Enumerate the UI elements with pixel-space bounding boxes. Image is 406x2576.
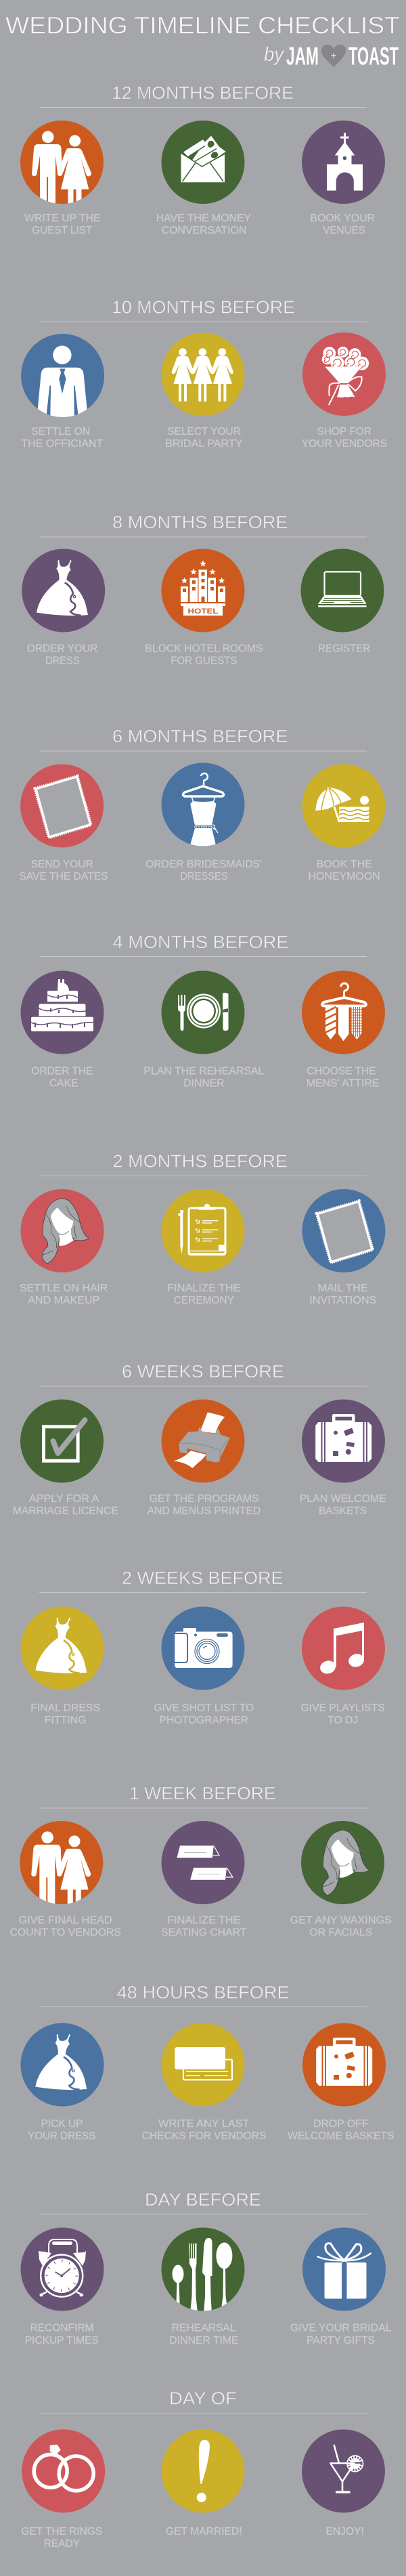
label: order your dress — [27, 643, 97, 666]
label: enjoy: ENJOY! — [325, 2526, 364, 2537]
label: shop for your vendors — [302, 426, 387, 450]
label: finalize the seating chart — [161, 1915, 247, 1938]
label: book your venues — [310, 213, 375, 236]
label: drop off welcome baskets: WELCOME BASKETS — [288, 2130, 394, 2142]
section: day of — [21, 2388, 385, 2550]
label: have the money conversation: HAVE THE MONEY — [156, 213, 251, 224]
icon: stamp — [20, 764, 104, 848]
label: rehearsal dinner time — [169, 2323, 238, 2346]
label: select your bridal party — [165, 426, 243, 450]
label: book the honeymoon: HONEYMOON — [308, 871, 380, 882]
heading: 2 WEEKS BEFORE — [122, 1568, 283, 1588]
icon: alarm clock — [20, 2228, 104, 2311]
heading: 1 WEEK BEFORE — [129, 1783, 276, 1803]
heading: 8 MONTHS BEFORE — [112, 512, 288, 532]
section: 1 week before — [9, 1783, 392, 1938]
label: shop for your vendors: YOUR VENDORS — [302, 438, 387, 450]
label: order your dress: DRESS — [45, 656, 80, 666]
label: finalize the seating chart: FINALIZE THE — [167, 1915, 241, 1926]
label: pick up your dress: PICK UP — [41, 2118, 83, 2130]
byline: by Jam + Toast logo: by — [264, 43, 285, 66]
icon: dress — [20, 2023, 104, 2106]
label: give your bridal party gifts: PARTY GIFTS — [307, 2335, 375, 2346]
label: select your bridal party: SELECT YOUR — [167, 426, 241, 437]
label: register: REGISTER — [318, 643, 370, 654]
label: choose the mens' attire: CHOOSE THE — [307, 1066, 376, 1077]
heading: 48 HOURS BEFORE — [117, 1982, 290, 2002]
label: mail the invitations: MAIL THE — [318, 1283, 368, 1294]
icon: couple — [20, 1821, 103, 1907]
icon: bouquet — [302, 332, 386, 416]
section: 2 months before — [20, 1151, 386, 1306]
heading: DAY BEFORE — [145, 2189, 261, 2210]
icon: money envelope — [161, 121, 245, 204]
label: finalize the ceremony: FINALIZE THE — [167, 1283, 241, 1294]
label: book the honeymoon — [308, 859, 380, 882]
label: order the cake — [31, 1066, 93, 1089]
icon: camera — [161, 1606, 245, 1690]
icon: beach umbrella — [302, 764, 386, 848]
byline: by Jam + Toast logo: JAM — [286, 42, 319, 70]
label: give final head count to vendors: GIVE FINAL HEAD — [19, 1915, 112, 1926]
section: 6 months before — [19, 726, 386, 882]
section: 12 months before — [20, 83, 385, 236]
label: block hotel rooms for guests: BLOCK HOTEL ROOMS — [145, 643, 263, 654]
label: write up the guest list: GUEST LIST — [32, 225, 92, 236]
section: 8 months before — [22, 512, 384, 666]
label: get the programs and menus printed: AND MENUS PRINTED — [148, 1505, 261, 1517]
label: settle on the officiant — [21, 426, 104, 450]
label: final dress fitting — [30, 1702, 100, 1726]
label: give your bridal party gifts: GIVE YOUR BRIDAL — [290, 2323, 392, 2334]
label: apply for a marriage licence: APPLY FOR A — [29, 1493, 99, 1505]
label: shop for your vendors: SHOP FOR — [317, 426, 371, 437]
byline: by Jam + Toast logo: + — [330, 50, 337, 62]
label: settle on hair and makeup: AND MAKEUP — [28, 1295, 99, 1306]
icon: cutlery — [161, 2228, 245, 2313]
icon: officiant — [21, 334, 104, 420]
label: plan the rehearsal dinner: DINNER — [183, 1078, 224, 1089]
label: have the money conversation — [156, 213, 251, 236]
icon: ties on hanger — [302, 971, 385, 1054]
label: get the rings ready: GET THE RINGS — [21, 2526, 102, 2537]
label: write up the guest list: WRITE UP THE — [24, 213, 100, 224]
icon: printer — [161, 1399, 245, 1483]
section: 48 hours before — [20, 1982, 394, 2142]
icon: couple — [20, 121, 104, 206]
label: select your bridal party: BRIDAL PARTY — [165, 438, 243, 450]
label: get the rings ready — [21, 2526, 102, 2550]
icon: clipboard — [161, 1189, 245, 1272]
icon: exclamation mark — [161, 2430, 245, 2512]
label: final dress fitting: FINAL DRESS — [30, 1702, 100, 1714]
icon: bridal party — [161, 333, 245, 416]
label: plan welcome baskets — [300, 1493, 386, 1517]
label: mail the invitations — [309, 1283, 376, 1306]
label: choose the mens' attire: MENS’ ATTIRE — [307, 1078, 380, 1089]
label: choose the mens' attire — [307, 1066, 380, 1089]
label: book your venues: BOOK YOUR — [310, 213, 375, 224]
icon: hair and makeup — [20, 1189, 104, 1272]
icon: rings — [22, 2430, 105, 2512]
label: write up the guest list — [24, 213, 100, 236]
section: 10 months before — [21, 297, 387, 450]
label: send your save the dates: SEND YOUR — [31, 859, 93, 870]
label: pick up your dress — [28, 2118, 95, 2142]
label: send your save the dates — [19, 859, 108, 882]
label: write any last checks for vendors: WRITE ANY LAST — [158, 2118, 250, 2130]
label: settle on hair and makeup: SETTLE ON HAIR — [20, 1283, 108, 1294]
label: finalize the ceremony: CEREMONY — [174, 1295, 234, 1306]
icon: suitcase — [302, 1399, 385, 1483]
label: get the programs and menus printed — [148, 1493, 261, 1517]
heading: 6 MONTHS BEFORE — [112, 726, 288, 746]
icon: dress on hanger — [161, 763, 245, 846]
icon: gift — [302, 2228, 386, 2311]
label: reconfirm pickup times: RECONFIRM — [30, 2323, 93, 2334]
label: drop off welcome baskets — [288, 2118, 394, 2142]
label: give playlists to dj: TO DJ — [328, 1715, 358, 1726]
heading: 10 MONTHS BEFORE — [112, 297, 295, 317]
title: WEDDING TIMELINE CHECKLIST — [5, 12, 400, 39]
label: plan the rehearsal dinner — [143, 1066, 264, 1089]
label: get the rings ready: READY — [44, 2538, 80, 2550]
label: give playlists to dj — [301, 1702, 385, 1726]
label: give shot list to photographer: GIVE SHOT LIST TO — [154, 1702, 254, 1714]
label: order bridesmaids' dresses — [145, 859, 263, 882]
icon: laptop — [300, 549, 384, 632]
label: plan welcome baskets: BASKETS — [319, 1505, 367, 1517]
label: block hotel rooms for guests: FOR GUESTS — [171, 656, 237, 666]
label: give final head count to vendors: COUNT TO VENDORS — [9, 1927, 121, 1938]
icon: place setting — [161, 971, 245, 1054]
label: order your dress: ORDER YOUR — [27, 643, 97, 654]
label: apply for a marriage licence: MARRIAGE LICENCE — [13, 1505, 118, 1517]
label: write any last checks for vendors — [142, 2118, 266, 2142]
label: drop off welcome baskets: DROP OFF — [313, 2118, 369, 2130]
label: order the cake: ORDER THE — [31, 1066, 93, 1077]
icon: music notes — [302, 1606, 385, 1690]
label: settle on the officiant: SETTLE ON — [31, 426, 90, 437]
label: get the programs and menus printed: GET THE PROGRAMS — [150, 1493, 258, 1505]
label: give shot list to photographer: PHOTOGRAPHER — [160, 1715, 248, 1726]
icon: church — [302, 121, 385, 204]
icon: cake — [20, 971, 104, 1054]
label: plan the rehearsal dinner: PLAN THE REHEARSAL — [143, 1066, 264, 1077]
label: order the cake: CAKE — [49, 1078, 78, 1089]
heading: 4 MONTHS BEFORE — [112, 932, 288, 952]
icon: cocktail — [302, 2430, 385, 2512]
label: order bridesmaids' dresses: DRESSES — [180, 871, 228, 882]
heading: 2 MONTHS BEFORE — [112, 1151, 288, 1172]
icon: hotel: HOTEL — [188, 607, 219, 616]
label: get any waxings or facials — [290, 1915, 392, 1938]
label: rehearsal dinner time: REHEARSAL — [172, 2323, 236, 2334]
label: give playlists to dj: GIVE PLAYLISTS — [301, 1702, 385, 1714]
label: mail the invitations: INVITATIONS — [309, 1295, 376, 1306]
label: reconfirm pickup times — [25, 2323, 99, 2346]
label: give your bridal party gifts — [290, 2323, 392, 2346]
section: 2 weeks before — [20, 1568, 385, 1726]
label: book the honeymoon: BOOK THE — [317, 859, 372, 870]
icon: dress — [22, 549, 105, 632]
heading: 6 WEEKS BEFORE — [122, 1361, 284, 1381]
label: settle on hair and makeup — [20, 1283, 108, 1306]
label: apply for a marriage licence — [13, 1493, 118, 1517]
label: get any waxings or facials: OR FACIALS — [309, 1927, 372, 1938]
label: get any waxings or facials: GET ANY WAXINGS — [290, 1915, 392, 1926]
heading: DAY OF — [169, 2388, 237, 2408]
icon: invitation stamp — [302, 1189, 386, 1272]
label: pick up your dress: YOUR DRESS — [28, 2130, 95, 2142]
heading: 12 MONTHS BEFORE — [112, 83, 294, 103]
label: reconfirm pickup times: PICKUP TIMES — [25, 2335, 99, 2346]
label: give shot list to photographer — [154, 1702, 254, 1726]
section: day before — [20, 2189, 392, 2346]
label: give final head count to vendors — [9, 1915, 121, 1938]
section: 6 weeks before — [13, 1361, 386, 1517]
label: book your venues: VENUES — [323, 225, 365, 236]
label: order bridesmaids' dresses: ORDER BRIDESMAIDS’ — [145, 859, 263, 870]
icon: checks — [161, 2023, 245, 2106]
label: final dress fitting: FITTING — [45, 1715, 86, 1726]
label: finalize the ceremony — [167, 1283, 241, 1306]
icon: hotel — [161, 549, 245, 632]
icon: hair — [301, 1821, 384, 1904]
label: send your save the dates: SAVE THE DATES — [19, 871, 108, 882]
icon: place cards — [161, 1821, 245, 1904]
label: finalize the seating chart: SEATING CHART — [161, 1927, 247, 1938]
label: write any last checks for vendors: CHECKS FOR VENDORS — [142, 2130, 266, 2142]
label: have the money conversation: CONVERSATION — [162, 225, 246, 236]
label: rehearsal dinner time: DINNER TIME — [169, 2335, 238, 2346]
label: block hotel rooms for guests — [145, 643, 263, 666]
icon: dress — [20, 1606, 104, 1690]
label: get married: GET MARRIED! — [166, 2526, 242, 2537]
byline: by Jam + Toast logo — [264, 42, 399, 70]
icon: suitcase — [302, 2023, 386, 2106]
label: plan welcome baskets: PLAN WELCOME — [300, 1493, 386, 1505]
section: 4 months before — [20, 932, 385, 1089]
label: settle on the officiant: THE OFFICIANT — [21, 438, 104, 450]
icon: checkbox — [20, 1399, 104, 1483]
